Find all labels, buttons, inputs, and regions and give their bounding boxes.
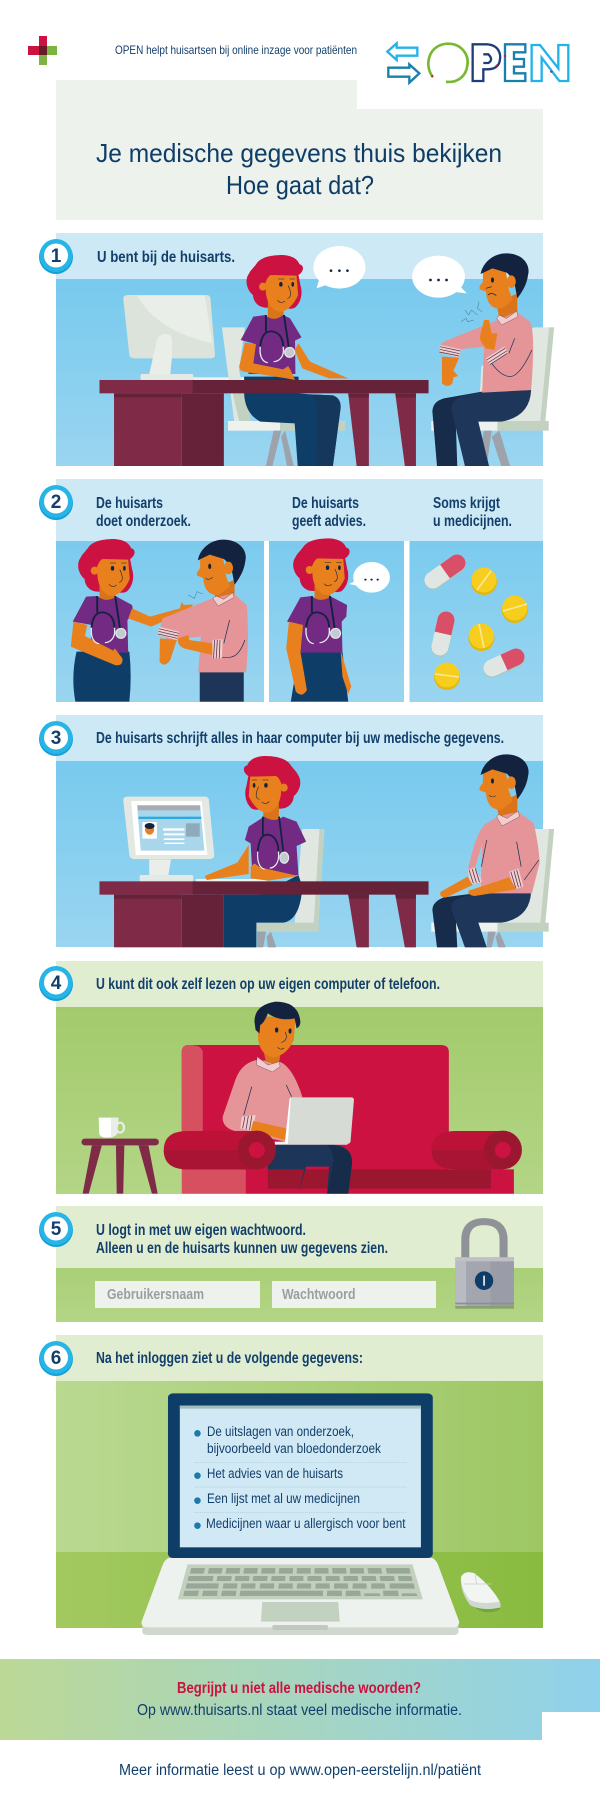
speech bubble [349, 562, 390, 593]
laptop base [141, 1558, 459, 1635]
panel: step 5 [39, 1206, 543, 1322]
patient seated [432, 754, 540, 947]
step 2 captions: De huisarts [96, 495, 163, 512]
step 2 captions: Soms krijgt [433, 495, 500, 512]
speech bubble [412, 256, 467, 298]
doctor advising [286, 538, 351, 702]
title: Hoe gaat dat? [226, 170, 374, 200]
callout info: Op www.thuisarts.nl staat veel medische informatie. [137, 1702, 462, 1719]
left armrest [164, 1131, 276, 1169]
panel: step 4 [39, 961, 543, 1194]
mouse [461, 1572, 501, 1612]
step badge 3: 3 [51, 728, 61, 749]
title [96, 138, 502, 200]
side table with cup [82, 1118, 159, 1194]
step badge 1: 1 [51, 246, 62, 267]
patient pain [158, 540, 248, 702]
step badge 6: 6 [51, 1348, 61, 1369]
title panel [56, 80, 543, 220]
panel: step 6 [39, 1335, 543, 1635]
desk [99, 380, 429, 466]
step badge 6 [39, 1341, 73, 1376]
on-screen list: bijvoorbeeld van bloedonderzoek [207, 1441, 381, 1456]
step 2 captions: De huisarts [292, 495, 359, 512]
step badge 4: 4 [51, 973, 62, 994]
step badge 2 [39, 485, 73, 520]
doctor typing [205, 756, 306, 947]
on-screen list [206, 1424, 406, 1531]
step 6 text: Na het inloggen ziet u de volgende gegevens: [96, 1350, 363, 1367]
step 3 text: De huisarts schrijft alles in haar computer bij uw medische gegevens. [96, 730, 504, 747]
step 1 text: U bent bij de huisarts. [97, 249, 235, 266]
step 5 text: Alleen u en de huisarts kunnen uw gegevens zien. [96, 1240, 388, 1257]
panel: step 1 [39, 233, 554, 466]
step badge 5 [39, 1212, 73, 1247]
on-screen list: Het advies van de huisarts [207, 1466, 343, 1481]
illustration: laptop [141, 1393, 501, 1635]
step 5 text [96, 1222, 388, 1257]
footer callout [0, 1659, 600, 1740]
step 2 captions: geeft advies. [292, 513, 366, 530]
illustration: patient on sofa [82, 1002, 522, 1194]
callout question: Begrijpt u niet alle medische woorden? [177, 1680, 421, 1697]
step badge 5: 5 [51, 1219, 62, 1240]
footer link: Meer informatie leest u op www.open-eerstelijn.nl/patiënt [119, 1762, 482, 1779]
speech bubble [313, 246, 365, 289]
step 4 text: U kunt dit ook zelf lezen op uw eigen computer of telefoon. [96, 976, 440, 993]
pills [433, 554, 528, 690]
title: Je medische gegevens thuis bekijken [96, 138, 502, 168]
step 2 captions [96, 495, 512, 530]
username field: Gebruikersnaam [107, 1287, 204, 1303]
on-screen list: Medicijnen waar u allergisch voor bent [206, 1516, 406, 1531]
illustration: doctor at computer [99, 754, 554, 947]
step badge 3 [39, 721, 73, 756]
logo: red-green cross [28, 36, 57, 65]
illustration: examination [71, 538, 390, 702]
icon: padlock [455, 1222, 514, 1309]
step 2 captions: doet onderzoek. [96, 513, 191, 530]
step badge 2: 2 [51, 492, 61, 513]
laptop screen frame [168, 1393, 433, 1558]
logo: OPEN [387, 43, 568, 83]
person with laptop [223, 1002, 354, 1194]
computer monitor [123, 797, 267, 882]
list bullets [194, 1430, 201, 1529]
on-screen list: De uitslagen van onderzoek, [207, 1424, 354, 1439]
step 5 text: U logt in met uw eigen wachtwoord. [96, 1222, 306, 1239]
panel: step 3 [39, 715, 554, 947]
step 2 captions: u medicijnen. [433, 513, 512, 530]
doctor examining [71, 539, 193, 702]
step badge 1 [39, 239, 73, 274]
doctor [239, 255, 348, 466]
on-screen list: Een lijst met al uw medicijnen [207, 1491, 360, 1506]
password field [272, 1281, 436, 1308]
password field: Wachtwoord [282, 1287, 356, 1303]
illustration: consultation [99, 246, 554, 466]
sofa [182, 1045, 522, 1194]
patient [432, 253, 533, 466]
tagline: OPEN helpt huisartsen bij online inzage voor patiënten [115, 43, 357, 57]
panel: step 2 [39, 479, 543, 702]
step badge 4 [39, 966, 73, 1001]
username field [95, 1281, 260, 1308]
desk [99, 881, 429, 947]
